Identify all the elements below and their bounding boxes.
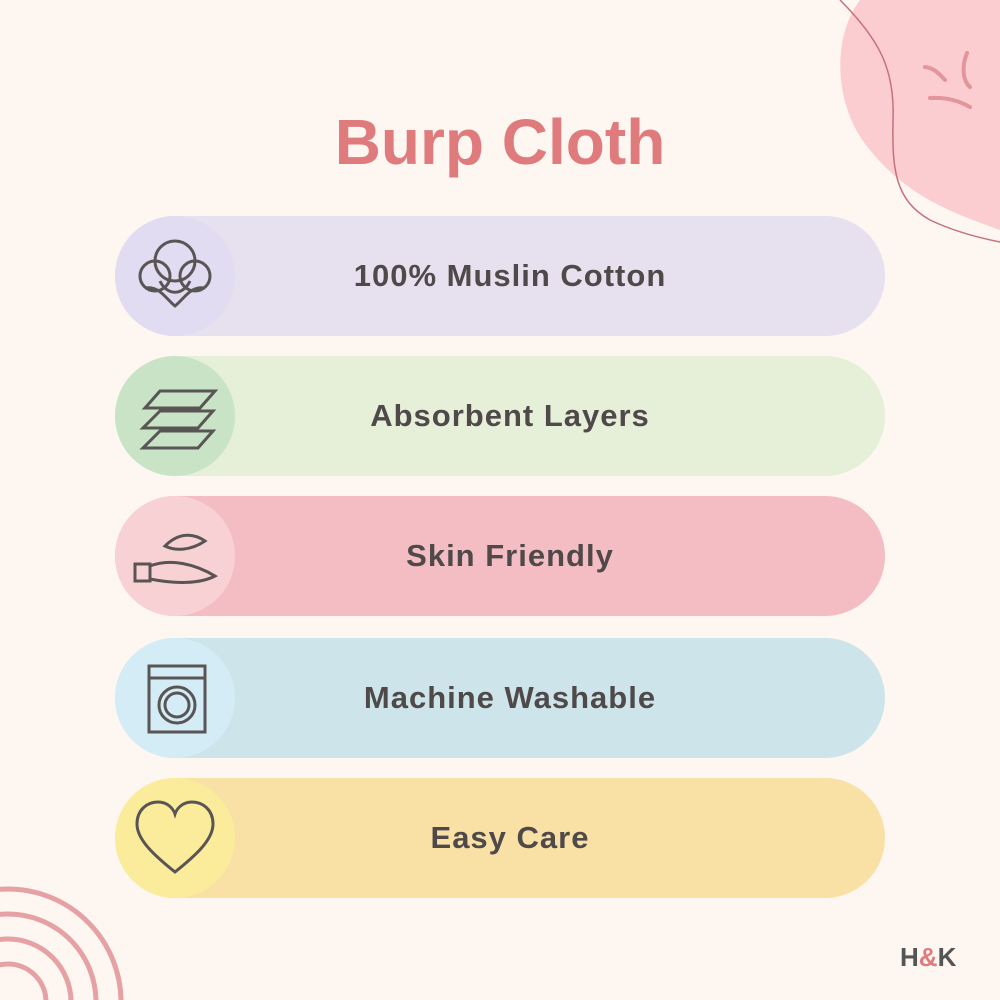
row: machine washable	[115, 638, 885, 758]
icon: cotton	[115, 216, 235, 336]
logo: H&K	[900, 942, 956, 972]
icon: heart	[115, 778, 235, 898]
row: skin friendly	[115, 496, 885, 616]
row: skin friendly: Skin Friendly	[406, 538, 614, 573]
row: absorbent layers: Absorbent Layers	[370, 398, 650, 433]
row: muslin cotton: 100% Muslin Cotton	[354, 258, 666, 293]
icon: washing machine	[115, 638, 235, 758]
row: muslin cotton	[115, 216, 885, 336]
icon: layers	[115, 356, 235, 476]
icon: hand with feather	[115, 496, 235, 616]
row: easy care	[115, 778, 885, 898]
row: easy care: Easy Care	[431, 820, 589, 855]
row: machine washable: Machine Washable	[364, 680, 656, 715]
decorative arcs bottom left	[0, 889, 121, 1000]
row: absorbent layers	[115, 356, 885, 476]
title: Burp Cloth	[335, 106, 665, 178]
